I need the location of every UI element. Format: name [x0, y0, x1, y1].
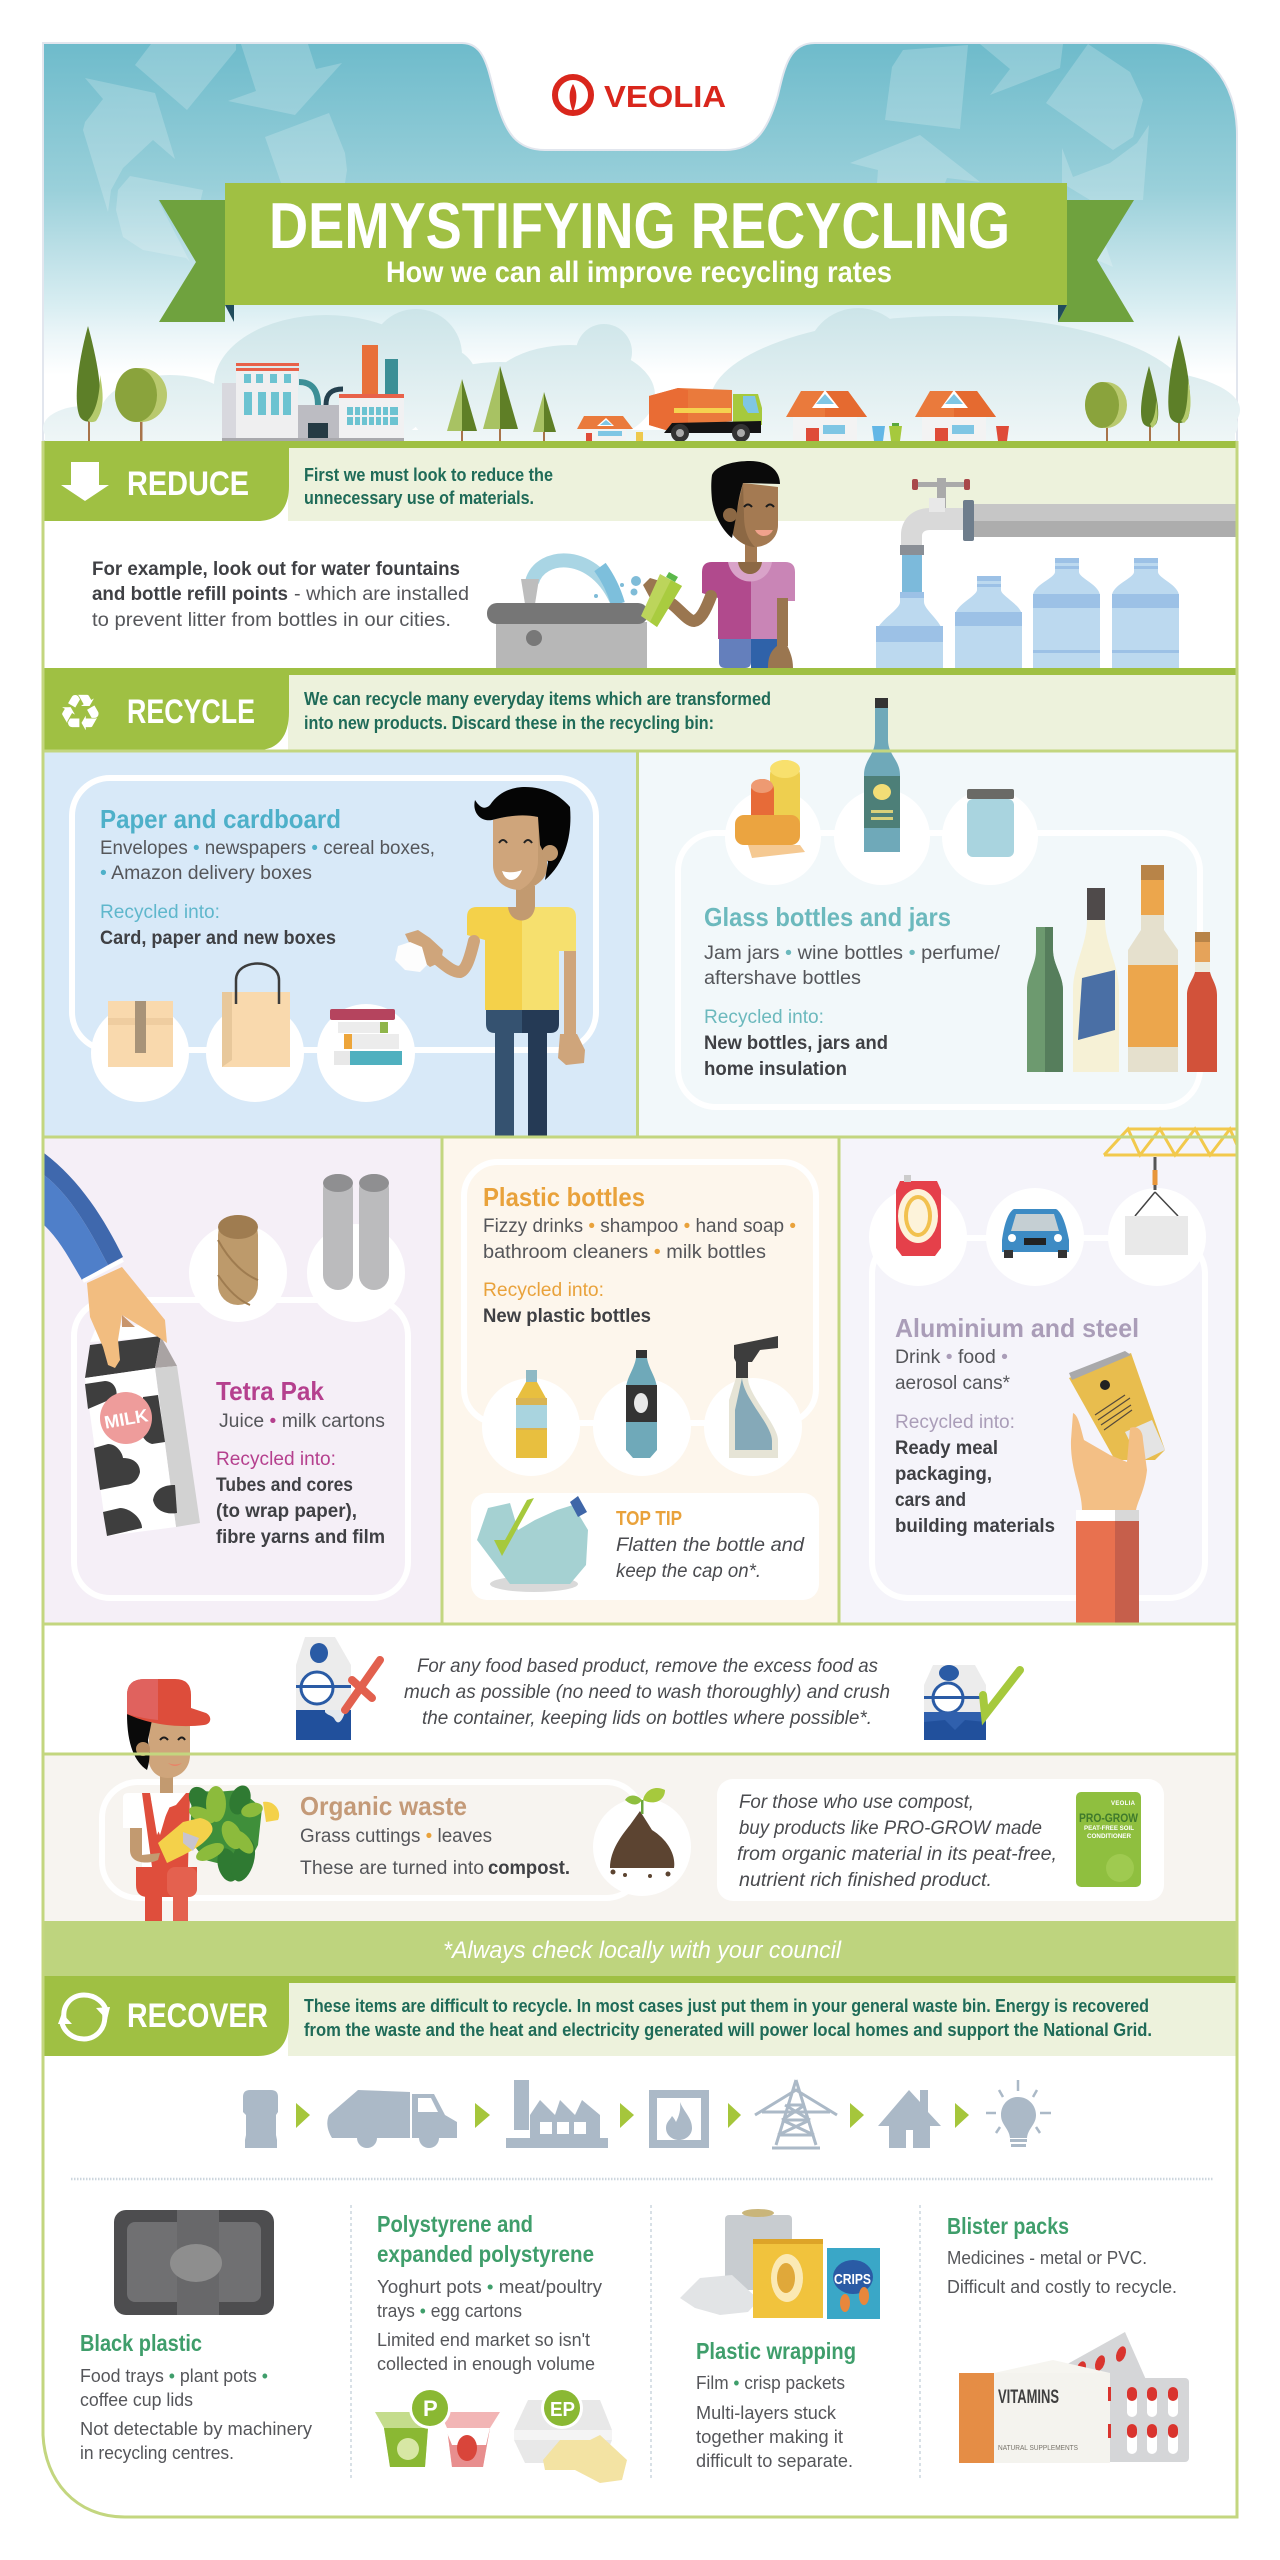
food advice text: For any food based product, remove the excess food as [417, 1656, 878, 1677]
icon: water bottle [626, 1350, 657, 1458]
polystyrene text: trays • egg cartons [377, 2301, 522, 2321]
icon: vitamins box and blisters: NATURAL SUPPLEMENTS [998, 2443, 1078, 2452]
factory [222, 345, 404, 441]
icon: oil bottle [516, 1370, 547, 1458]
recover tab [43, 1976, 289, 2056]
aluminium text: aerosol cans* [895, 1373, 1011, 1394]
reduce tab [43, 441, 289, 521]
icon: light bulb [986, 2080, 1051, 2147]
icon: down arrow [61, 462, 109, 501]
compost info box [717, 1779, 1164, 1901]
polystyrene text: collected in enough volume [377, 2354, 595, 2374]
section: recycle header [43, 668, 1237, 750]
paper text: • Amazon delivery boxes [100, 863, 312, 884]
plastic wrapping text [696, 2338, 856, 2471]
milk carton [85, 1325, 200, 1536]
black plastic text [80, 2330, 312, 2463]
top tip icon [477, 1496, 588, 1592]
food advice text: much as possible (no need to wash thoroughly) and crush [404, 1682, 890, 1703]
aluminium text: cars and [895, 1490, 966, 1511]
polystyrene text: Polystyrene and [377, 2211, 533, 2237]
person with bottle [641, 461, 795, 668]
icon: crane [1104, 1129, 1237, 1255]
tap and pipe [900, 478, 1237, 555]
header sky panel [43, 43, 1237, 441]
black plastic text: Black plastic [80, 2330, 202, 2356]
man holding paper [395, 787, 585, 1136]
compost info text: nutrient rich finished product. [739, 1870, 992, 1891]
icon: egg carton and foam: EP [550, 2399, 575, 2421]
landscape: trees right [1085, 335, 1191, 441]
icon: black tray [114, 2210, 274, 2315]
compost info text: For those who use compost, [739, 1792, 974, 1813]
energy recovery process icons [243, 2080, 1051, 2148]
icon: yoghurt pots: P [423, 2396, 438, 2421]
plastic text [483, 1182, 796, 1327]
panel: paper and cardboard [43, 752, 637, 1136]
plastic text: New plastic bottles [483, 1306, 651, 1327]
icon: blue car [1002, 1209, 1069, 1258]
item: plastic wrapping [680, 2209, 880, 2471]
icon: cream bottle [1073, 888, 1119, 1072]
blister text: Blister packs [947, 2213, 1069, 2239]
aluminium text: Ready meal [895, 1438, 998, 1459]
water stream [902, 555, 922, 593]
black plastic text: Food trays • plant pots • [80, 2366, 268, 2386]
icon: recycle symbol: ♻ [58, 684, 103, 742]
icon: Pro-Grow pack [1076, 1792, 1141, 1887]
section: recover header [43, 1976, 1237, 2056]
glass text: New bottles, jars and [704, 1033, 888, 1054]
logo: Veolia [555, 77, 726, 114]
black plastic text: Not detectable by machinery [80, 2419, 312, 2439]
houses and bins [786, 390, 1009, 441]
clouds [43, 308, 1240, 488]
compost info text [737, 1792, 1057, 1891]
icon: vitamins box and blisters [959, 2332, 1189, 2463]
reduce example text: to prevent litter from bottles in our cities. [92, 610, 451, 631]
dividers [71, 2179, 1214, 2480]
reduce intro: First we must look to reduce the [304, 465, 553, 485]
aluminium text [895, 1313, 1139, 1537]
icon: Pro-Grow pack: PEAT-FREE SOIL [1084, 1825, 1134, 1832]
icon: bin [243, 2090, 278, 2148]
icon: perfume bottle [1128, 865, 1178, 1072]
glass text: Jam jars • wine bottles • perfume/ [704, 943, 1001, 964]
compost info text: buy products like PRO-GROW made [739, 1818, 1042, 1839]
top tip text: keep the cap on*. [616, 1561, 761, 1582]
tetra text: Recycled into: [216, 1449, 336, 1470]
reduce intro: unnecessary use of materials. [304, 488, 534, 508]
icon: Pro-Grow pack: CONDITIONER [1087, 1833, 1131, 1840]
water bottles [876, 558, 1179, 668]
tetra text: (to wrap paper), [216, 1501, 357, 1522]
compost info text: from organic material in its peat-free, [737, 1844, 1057, 1865]
icon: grey tubes [323, 1174, 389, 1290]
top tip text: TOP TIP [616, 1508, 682, 1530]
item: black plastic [80, 2210, 312, 2463]
icon: Pro-Grow pack: VEOLIA [1111, 1801, 1136, 1807]
item: blister packs [947, 2213, 1189, 2463]
reduce example text: and bottle refill points [92, 584, 288, 605]
item: polystyrene [375, 2211, 627, 2483]
hand holding can [1069, 1351, 1165, 1623]
outer border [43, 441, 1237, 2517]
polystyrene text: Yoghurt pots • meat/poultry [377, 2277, 602, 2297]
icon: clean carton with tick [924, 1665, 1020, 1740]
panel: aluminium and steel [840, 1129, 1237, 1623]
blister text: Difficult and costly to recycle. [947, 2277, 1177, 2297]
icon: books [330, 1009, 402, 1065]
reduce example text: For example, look out for water fountains [92, 559, 460, 580]
panel: plastic bottles [443, 1138, 838, 1623]
organic text: Organic waste [300, 1791, 467, 1821]
organic text: Grass cuttings • leaves [300, 1826, 492, 1847]
aluminium text: Drink • food • [895, 1347, 1008, 1368]
icon: truck [327, 2090, 457, 2148]
recycle intro: We can recycle many everyday items which are transformed [304, 689, 771, 709]
council note band [43, 1921, 1237, 1976]
glass text [704, 902, 1001, 1080]
paper text [100, 804, 435, 949]
tetra text [216, 1376, 385, 1548]
tetra text: Juice • milk cartons [219, 1411, 385, 1432]
icon: wine bottle [864, 698, 900, 852]
panel: glass bottles and jars [638, 698, 1237, 1136]
icon: spray bottle [729, 1336, 778, 1458]
icon: yoghurt pots [375, 2387, 500, 2467]
panel: tetra pak [43, 1138, 441, 1623]
plastic wrapping text: together making it [696, 2427, 843, 2447]
council note band: *Always check locally with your council [443, 1937, 842, 1964]
recycle intro: into new products. Discard these in the recycling bin: [304, 713, 714, 733]
icon: drink can [896, 1175, 941, 1256]
panel: organic waste [43, 1755, 1237, 1921]
icon: cardboard tube [218, 1215, 258, 1305]
panel: food container advice [43, 1625, 1237, 1754]
black plastic text: coffee cup lids [80, 2390, 193, 2410]
title text: DEMYSTIFYING RECYCLING [269, 189, 1010, 262]
aluminium text: Aluminium and steel [895, 1313, 1139, 1343]
hand and sleeve [44, 1153, 167, 1368]
small house [577, 416, 643, 441]
icon: vitamins box and blisters: VITAMINS [998, 2387, 1059, 2408]
recover intro: from the waste and the heat and electricity generated will power local homes and support the National Grid. [304, 2020, 1152, 2040]
reduce intro [304, 465, 553, 508]
food advice text [404, 1656, 890, 1729]
plastic wrapping text: Plastic wrapping [696, 2338, 856, 2364]
tetra text: fibre yarns and film [216, 1527, 385, 1548]
reduce heading: REDUCE [127, 465, 249, 503]
glass text: Recycled into: [704, 1007, 824, 1028]
food advice text: the container, keeping lids on bottles where possible*. [422, 1708, 872, 1729]
icon: green bottle [1027, 927, 1063, 1072]
recover intro [304, 1996, 1152, 2040]
plastic wrapping text: difficult to separate. [696, 2451, 853, 2471]
conifer trees [447, 366, 556, 441]
glass text: Glass bottles and jars [704, 902, 951, 932]
recycle tab [43, 668, 289, 750]
icon: water fountain [487, 560, 648, 668]
icon: compost soil [610, 1788, 674, 1878]
plastic wrapping text: Film • crisp packets [696, 2373, 845, 2393]
glass text: aftershave bottles [704, 968, 861, 989]
blister text: Medicines - metal or PVC. [947, 2248, 1147, 2268]
section: reduce [43, 441, 1237, 668]
glass text: home insulation [704, 1059, 847, 1080]
paper text: Envelopes • newspapers • cereal boxes, [100, 838, 435, 859]
plastic text: Plastic bottles [483, 1182, 645, 1212]
polystyrene text: Limited end market so isn't [377, 2330, 590, 2350]
icon: recover arrows [58, 1995, 110, 2039]
title banner [159, 183, 1134, 322]
icon: red bottle [1187, 932, 1217, 1072]
icon: paper bag [222, 964, 290, 1067]
plastic text: Recycled into: [483, 1280, 604, 1301]
landscape: trees left [77, 326, 167, 441]
paper text: Card, paper and new boxes [100, 928, 336, 949]
plastic wrapping text: Multi-layers stuck [696, 2403, 837, 2423]
paper text: Paper and cardboard [100, 804, 341, 834]
recover intro: These items are difficult to recycle. In most cases just put them in your general waste bin. Energy is recovered [304, 1996, 1149, 2016]
process arrows [296, 2103, 969, 2128]
reduce example text: - which are installed [294, 584, 469, 605]
reduce example text [92, 559, 469, 631]
organic text [300, 1791, 570, 1879]
paper text: Recycled into: [100, 902, 220, 923]
polystyrene text: expanded polystyrene [377, 2241, 594, 2267]
recover heading: RECOVER [127, 1997, 268, 2035]
icon: insulation rolls [735, 760, 805, 858]
refuse truck [649, 388, 762, 442]
icon: plastic film, crisps: CRIPS [834, 2271, 871, 2288]
aluminium text: packaging, [895, 1464, 992, 1485]
icon: fire [649, 2090, 709, 2148]
farmer with leaves [123, 1679, 279, 1921]
aluminium text: Recycled into: [895, 1412, 1015, 1433]
top tip box [471, 1493, 819, 1600]
icon: egg carton and foam [514, 2387, 627, 2483]
plastic text: bathroom cleaners • milk bottles [483, 1242, 766, 1263]
organic text: These are turned into [300, 1858, 484, 1879]
icon: Pro-Grow pack: PRO-GROW [1079, 1811, 1139, 1825]
tetra text: Tubes and cores [216, 1475, 353, 1496]
polystyrene text [377, 2211, 602, 2374]
icon: cardboard box [108, 1001, 173, 1067]
tetra text: Tetra Pak [216, 1376, 325, 1406]
recycle heading: RECYCLE [127, 693, 255, 731]
logo: Veolia: VEOLIA [604, 79, 726, 114]
subtitle: How we can all improve recycling rates [386, 256, 892, 289]
icon: dirty carton with cross [296, 1637, 380, 1740]
icon: plastic film, crisps [680, 2209, 880, 2319]
icon: house [878, 2090, 941, 2148]
black plastic text: in recycling centres. [80, 2443, 234, 2463]
blister text [947, 2213, 1177, 2297]
icon: pylon [755, 2080, 837, 2148]
aluminium text: building materials [895, 1516, 1055, 1537]
icon: factory [506, 2080, 608, 2148]
top tip text [616, 1508, 806, 1582]
milk carton: MILK [103, 1405, 150, 1433]
organic text: compost. [488, 1858, 570, 1879]
recycle intro [304, 689, 771, 733]
icon: jam jar [967, 789, 1014, 857]
top tip text: Flatten the bottle and [616, 1535, 806, 1556]
plastic text: Fizzy drinks • shampoo • hand soap • [483, 1216, 796, 1237]
